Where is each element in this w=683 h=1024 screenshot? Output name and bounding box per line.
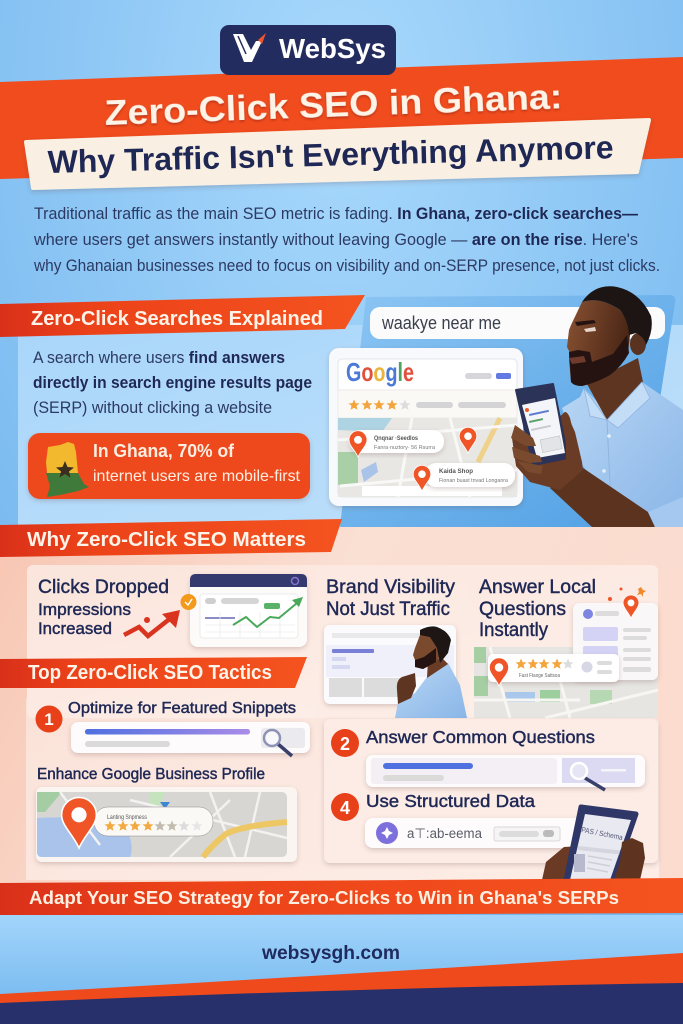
- illustration: man holding phone: [511, 286, 683, 527]
- footer: blue band: [0, 915, 683, 1000]
- palm: [512, 412, 583, 490]
- question card: [366, 755, 645, 790]
- number badge 2: [331, 729, 359, 757]
- number badge 1: 1: [44, 710, 54, 729]
- arrow: rising red: [124, 610, 180, 636]
- callout: mobile-first stat: [28, 433, 310, 499]
- beard: [569, 335, 629, 386]
- map: [474, 647, 658, 718]
- footer: orange swoosh: [0, 953, 683, 1010]
- title ribbon: cream: [26, 120, 649, 188]
- ribbon: section heading: Zero-Click Searches Explained: [31, 308, 323, 330]
- tactic 2: answer common questions: [331, 727, 645, 790]
- definition text: A search where users find answers: [33, 348, 285, 367]
- card: clicks dropped: Increased: [38, 620, 112, 638]
- tactic 3: google business profile: [36, 766, 297, 862]
- label: business rating: [94, 807, 213, 836]
- serp mockup: [324, 625, 456, 704]
- card: answer local questions: [474, 576, 658, 718]
- intro text: [33, 204, 660, 275]
- icon: large pin: [62, 797, 96, 848]
- panel: lower peach section: [0, 527, 683, 883]
- number badge 2: 2: [340, 734, 350, 754]
- eye and brow: [575, 320, 596, 326]
- rating card: [488, 654, 619, 682]
- tactic 1: featured snippets: Optimize for Featured Snippets: [68, 700, 296, 717]
- google wordmark: Google: [346, 357, 414, 387]
- label: listing two: Fionan buast tnvad Longanra: [439, 478, 509, 484]
- neck: [587, 358, 643, 420]
- tactic 3: google business profile: Enhance Google Business Profile: [37, 766, 265, 783]
- icon: check badge: [180, 594, 196, 610]
- panel: tactics background: [26, 695, 659, 880]
- snippet card: [71, 722, 310, 756]
- search bar: waakye near me: [381, 313, 501, 333]
- illustration: hands holding phone: [542, 807, 645, 880]
- card: brand visibility: Not Just Traffic: [326, 598, 450, 620]
- card: brand visibility: Brand Visibility: [326, 576, 455, 598]
- collar and placket: [584, 382, 650, 428]
- card: brand visibility: [316, 567, 469, 718]
- hair: [420, 626, 451, 663]
- panel: tactics right: [324, 719, 658, 863]
- phone: [516, 384, 568, 465]
- label: listing two: Kaida Shop: [439, 468, 473, 475]
- label: listing two: [425, 463, 515, 487]
- tactic 2: answer common questions: Answer Common Questions: [366, 727, 595, 747]
- card: clicks dropped: Impressions: [38, 601, 131, 619]
- callout: mobile-first stat: In Ghana, 70% of: [93, 441, 235, 461]
- tactic 4: structured data: [331, 791, 590, 848]
- panel: blue backdrop: [340, 295, 675, 527]
- icon: WebSys mark: [233, 33, 266, 62]
- illustration: thinking man: [395, 626, 467, 718]
- rating card: Fast Ftaoge Sattsoa: [519, 673, 561, 679]
- ribbon: why zero-click SEO matters: [0, 519, 342, 557]
- head: [567, 300, 630, 386]
- label: business rating: Lanting Snpmess: [107, 815, 147, 821]
- map: [338, 418, 517, 497]
- intro text: Traditional traffic as the main SEO metric is fading. In Ghana, zero-click searches—: [34, 204, 638, 223]
- map card: [36, 787, 297, 862]
- card: clicks dropped: [38, 574, 307, 647]
- intro text: where users get answers instantly without leaving Google — are on the rise. Here's: [33, 230, 638, 249]
- label: listing one: Qnqnar ·Seedlos: [374, 436, 419, 442]
- hair: [582, 286, 652, 345]
- card: clicks dropped: Clicks Dropped: [38, 576, 169, 598]
- definition text: directly in search engine results page: [33, 373, 312, 392]
- face: [413, 633, 444, 669]
- tactic 1: featured snippets: [36, 700, 310, 756]
- panel: why it matters cards: [27, 565, 658, 718]
- ribbon: top zero-click SEO tactics: [0, 657, 307, 688]
- ribbon: top zero-click SEO tactics: Top Zero-Click SEO Tactics: [28, 662, 272, 684]
- logo wordmark: WebSys: [279, 33, 386, 64]
- number badge 1: [36, 706, 62, 732]
- label: listing one: [350, 430, 444, 453]
- title banner: orange band: [0, 57, 683, 179]
- card: answer local questions: Questions: [479, 598, 566, 620]
- hand: [397, 673, 416, 704]
- icon: map pins: [349, 427, 477, 491]
- fingers: [511, 425, 543, 474]
- card: answer local questions: Answer Local: [479, 576, 596, 598]
- card: Google results: [329, 348, 523, 506]
- ribbon: section heading: [0, 295, 365, 337]
- footer: navy base: [0, 983, 683, 1024]
- call to action ribbon: [0, 878, 683, 916]
- ribbon: why zero-click SEO matters: Why Zero-Click SEO Matters: [27, 529, 306, 551]
- beard: [415, 648, 436, 669]
- logo badge: [220, 25, 396, 75]
- panel: zero-click searches explained: [0, 286, 683, 527]
- icon: Ghana map: [46, 442, 89, 497]
- card: answer local questions: Instantly: [479, 619, 548, 641]
- sleeve fold: [648, 497, 683, 527]
- tactic 4: structured data: Use Structured Data: [366, 791, 535, 811]
- profile card: [573, 603, 658, 680]
- rating stars: [348, 400, 410, 410]
- definition text: (SERP) without clicking a website: [33, 398, 272, 417]
- icon: pins and sparks: [489, 587, 646, 686]
- definition text: [33, 348, 312, 417]
- dashboard card: [190, 574, 307, 647]
- schema card: a⊤:ab-eema: [407, 826, 482, 841]
- shirt: [562, 382, 683, 527]
- label: listing one: Fanra·nuztory· 56 Rsurra: [374, 445, 436, 451]
- neck: [427, 658, 448, 678]
- thumb: [562, 412, 580, 465]
- callout: mobile-first stat: internet users are mobile-first: [93, 468, 301, 485]
- lips: [569, 356, 586, 364]
- schema card: [365, 818, 590, 848]
- ear: [630, 333, 646, 355]
- title line 2: Why Traffic Isn't Everything Anymore: [47, 129, 614, 180]
- call to action ribbon: Adapt Your SEO Strategy for Zero-Clicks to Win in Ghana's SERPs: [29, 888, 619, 908]
- illustration: hands holding phone: PAS / Schema: [581, 825, 624, 842]
- shirt: [395, 663, 467, 718]
- number badge 4: 4: [340, 798, 350, 818]
- search bar: [370, 307, 665, 339]
- forearm: [550, 468, 655, 527]
- number badge 4: [331, 793, 359, 821]
- footer url: websysgh.com: [261, 943, 400, 964]
- title line 1: Zero-Click SEO in Ghana:: [104, 77, 563, 133]
